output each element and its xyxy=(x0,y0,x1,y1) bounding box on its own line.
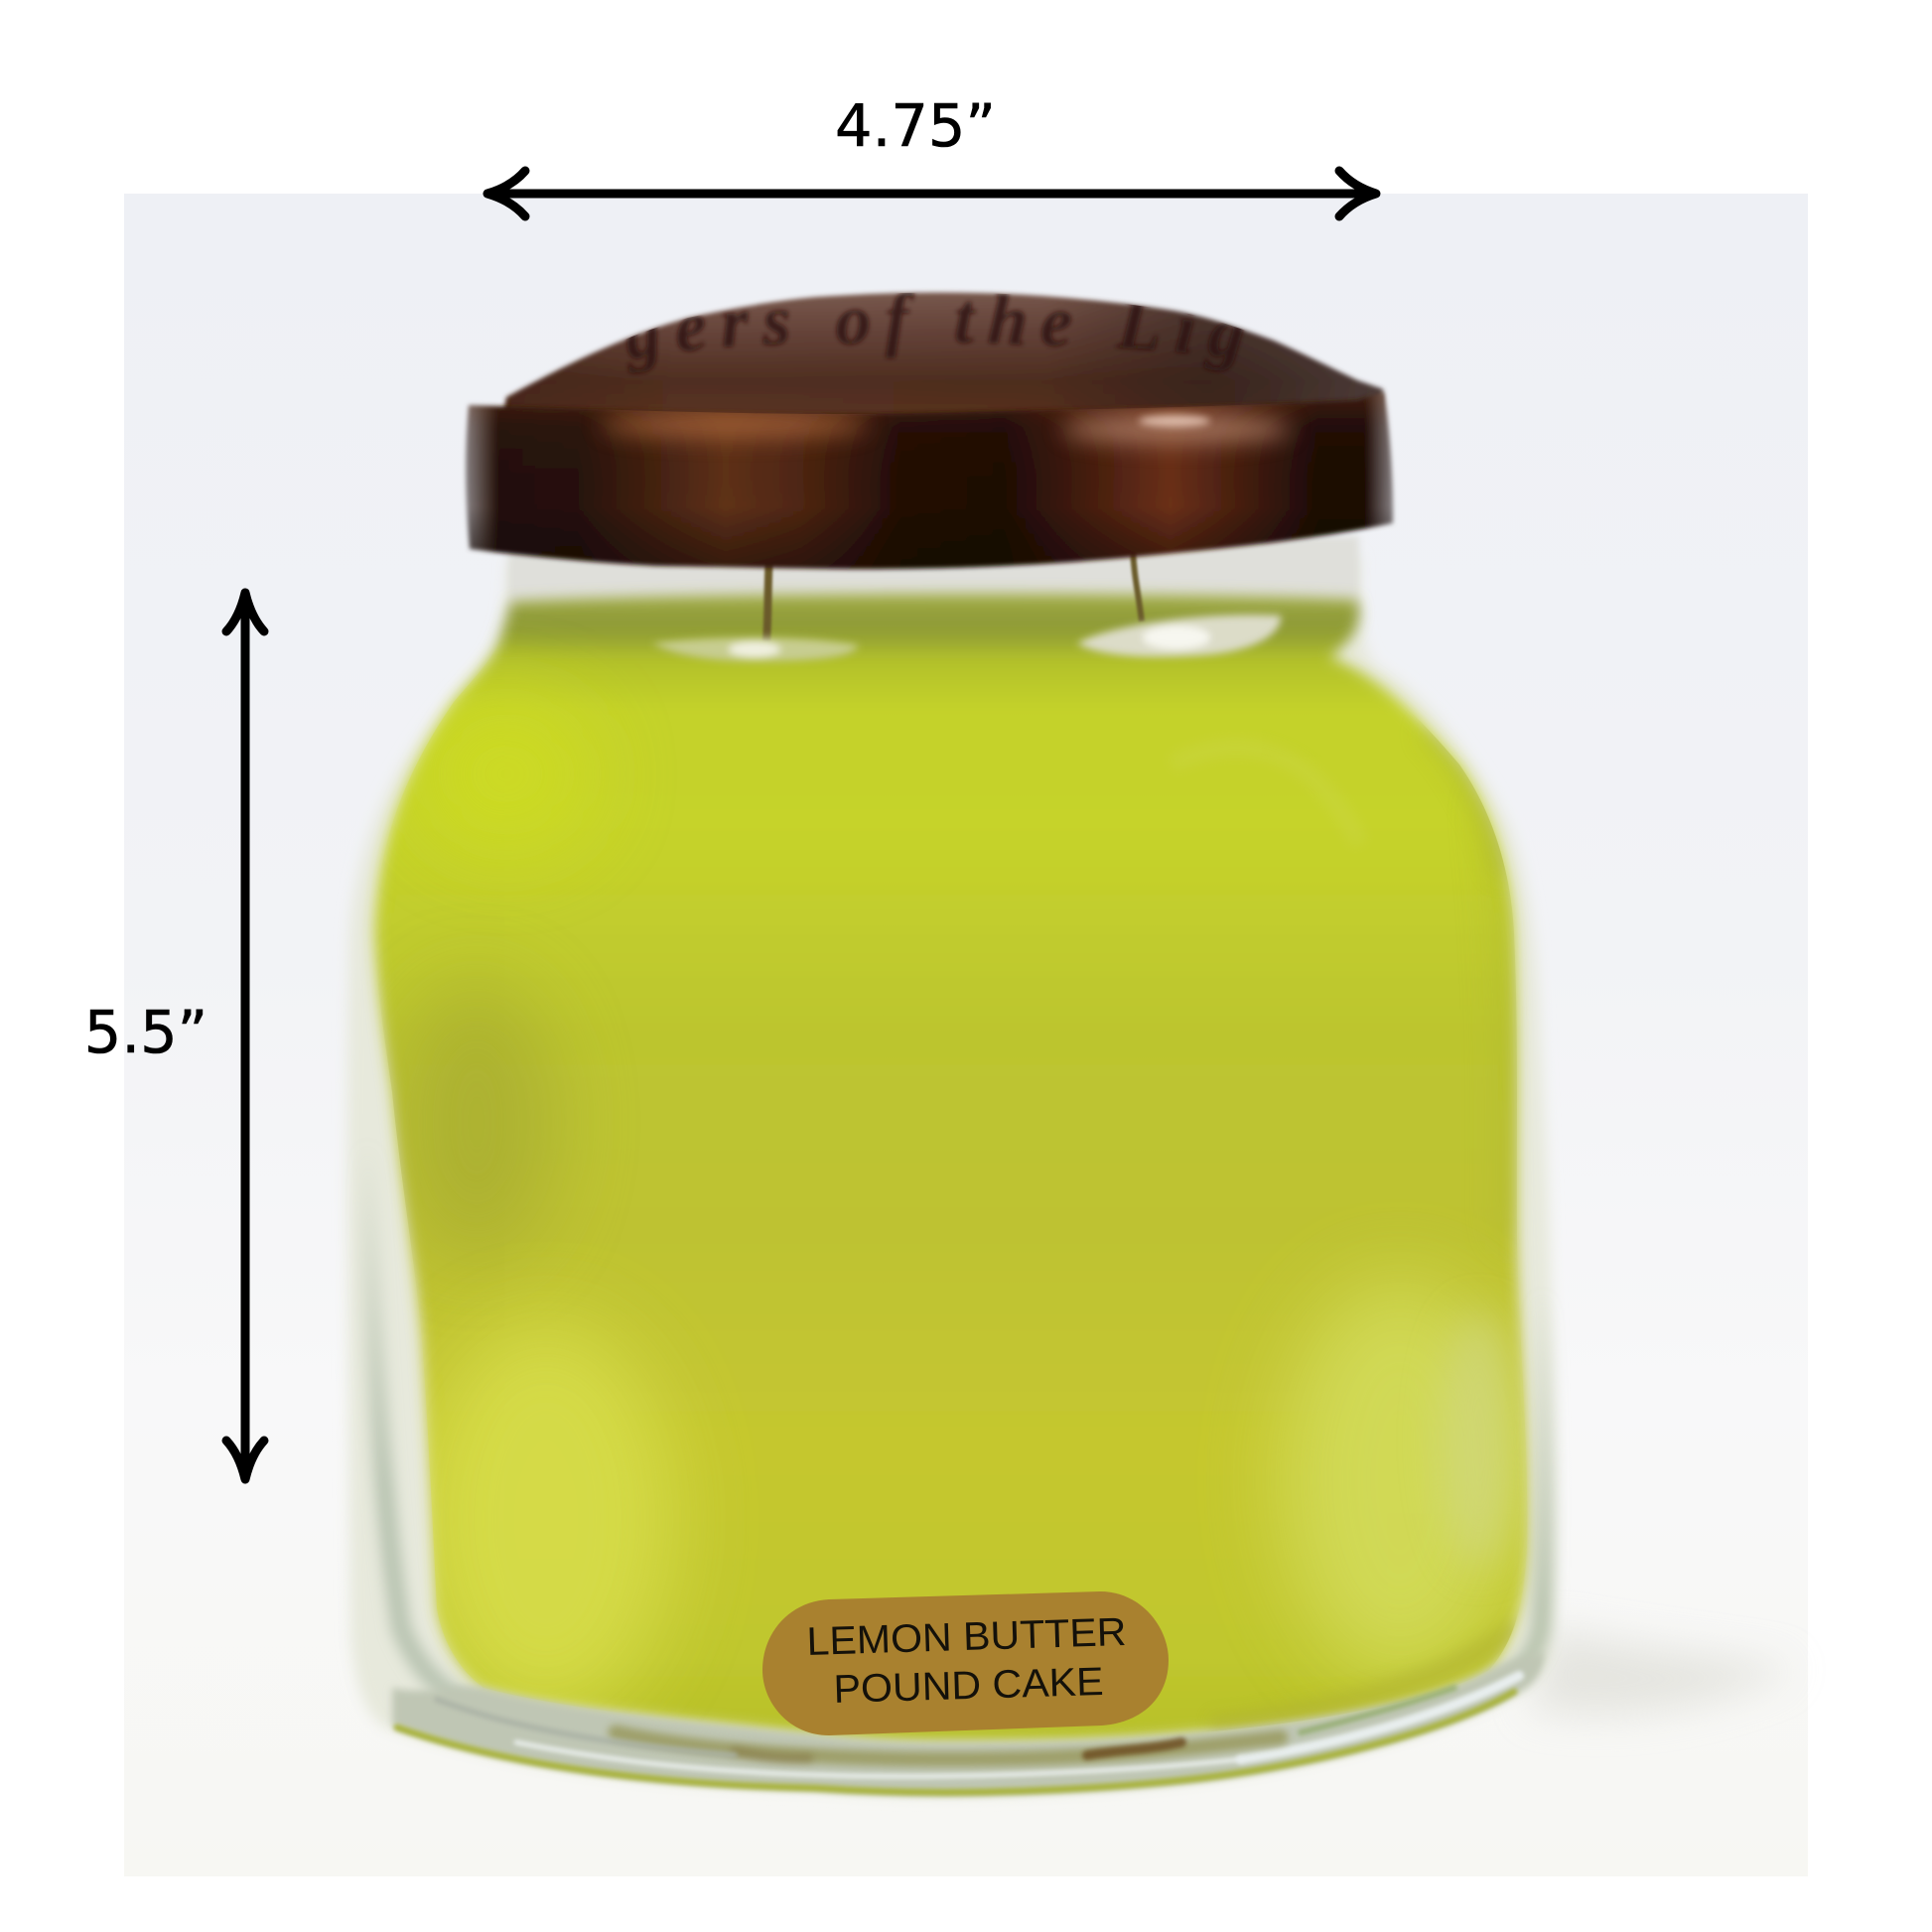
wax reflection highlights xyxy=(652,615,1281,661)
lid dome xyxy=(501,293,1383,422)
product label xyxy=(762,1591,1169,1735)
glass neck xyxy=(508,536,1359,616)
right side glass tint xyxy=(1509,1291,1545,1678)
candle jar xyxy=(347,536,1555,1795)
photo background panel xyxy=(124,194,1808,1876)
label text line 2: POUND CAKE xyxy=(833,1660,1104,1712)
right wick xyxy=(1133,548,1142,621)
height dimension label: 5.5” xyxy=(84,998,207,1066)
glass base xyxy=(392,1652,1544,1795)
lid band xyxy=(466,392,1393,569)
height arrow xyxy=(226,593,264,1479)
floor shadow xyxy=(1529,1628,1797,1715)
left side glass tint xyxy=(367,1142,467,1704)
wax shading xyxy=(397,695,1519,1727)
glass jar body xyxy=(347,556,1555,1795)
width arrow xyxy=(487,171,1376,216)
label sticker xyxy=(762,1591,1169,1735)
left wick xyxy=(766,554,769,641)
copper lid xyxy=(463,289,1396,573)
lid engraved text: gers of the Lig xyxy=(624,292,1246,375)
wax fill xyxy=(374,594,1527,1742)
label text line 1: LEMON BUTTER xyxy=(806,1610,1127,1664)
width dimension label: 4.75” xyxy=(835,91,996,160)
